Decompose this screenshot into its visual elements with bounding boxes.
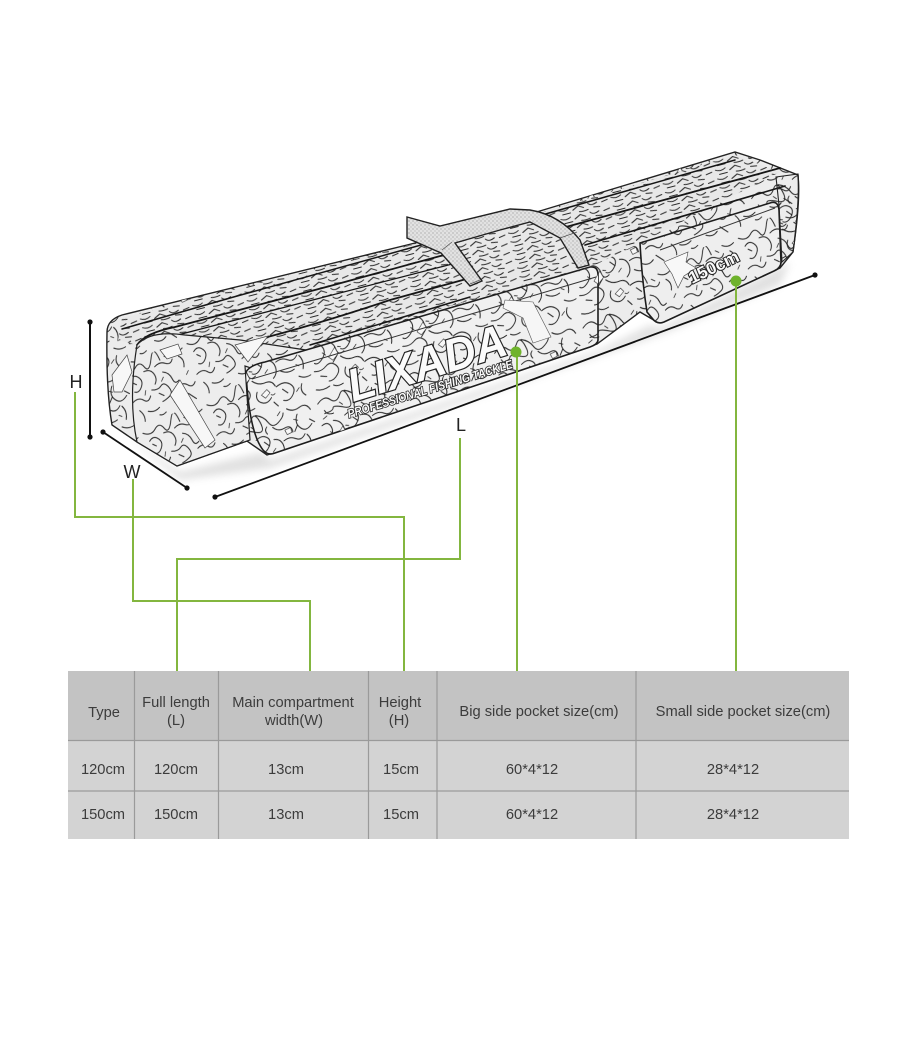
table row: 120cm: 120cm: [81, 762, 125, 778]
right end panel: [776, 174, 799, 262]
table row: 150cm: 60*4*12: [506, 807, 558, 823]
connector: width: [133, 479, 310, 671]
dimension line: width: [100, 429, 190, 491]
table row: 150cm: 28*4*12: [707, 807, 759, 823]
table header text: [88, 695, 830, 729]
dimension line: length: [212, 272, 818, 500]
table header text: Small side pocket size(cm): [656, 704, 830, 720]
bag illustration: [107, 152, 799, 480]
table header text: (L): [167, 713, 185, 729]
size table: [68, 671, 849, 839]
carry handle: [407, 209, 589, 286]
table header text: Full length: [142, 695, 210, 711]
table row: 120cm: 13cm: [268, 762, 304, 778]
table row: 120cm: 15cm: [383, 762, 419, 778]
table row: 120cm: 28*4*12: [707, 762, 759, 778]
big side pocket: [246, 267, 598, 454]
small side pocket: [640, 202, 781, 323]
left end panel: [132, 334, 306, 466]
table grid lines: [68, 671, 849, 839]
connector: length: [177, 438, 460, 671]
table header text: Height: [379, 695, 421, 711]
table header text: Type: [88, 705, 120, 721]
connector: height: [75, 392, 404, 671]
label: L: L: [456, 415, 466, 435]
table header text: (H): [389, 713, 409, 729]
table header text: Big side pocket size(cm): [459, 704, 619, 720]
bag main body: [107, 152, 798, 466]
top zippers: [122, 160, 785, 350]
white highlights on end panel: [112, 336, 268, 448]
table row: 150cm: 13cm: [268, 807, 304, 823]
size badge: 150cm: [685, 247, 742, 288]
dimension line: height: [87, 319, 93, 440]
top surface doodle texture: [118, 155, 780, 346]
table header text: Main compartment: [232, 695, 354, 711]
table body background: [68, 741, 849, 839]
table header background: [68, 671, 849, 741]
label: H: H: [70, 372, 82, 392]
table header text: width(W): [264, 713, 323, 729]
ground shadow: [125, 262, 790, 480]
brand logo: LIXADA: [341, 314, 513, 412]
top surface strips: [118, 155, 780, 346]
table row: 120cm: [81, 762, 759, 778]
table row: 150cm: 150cm: [81, 807, 125, 823]
left end panel texture: [132, 334, 306, 466]
table row: 120cm: 120cm: [154, 762, 198, 778]
logo tagline: PROFESSIONAL FISHING TACKLE: [346, 357, 515, 421]
table row: 150cm: 150cm: [154, 807, 198, 823]
connector: small side pocket: [730, 276, 742, 671]
label: W: W: [124, 462, 140, 482]
table row: 120cm: 60*4*12: [506, 762, 558, 778]
table row: 150cm: 15cm: [383, 807, 419, 823]
table row: 150cm: [81, 807, 759, 823]
connector: big side pocket: [510, 346, 522, 671]
